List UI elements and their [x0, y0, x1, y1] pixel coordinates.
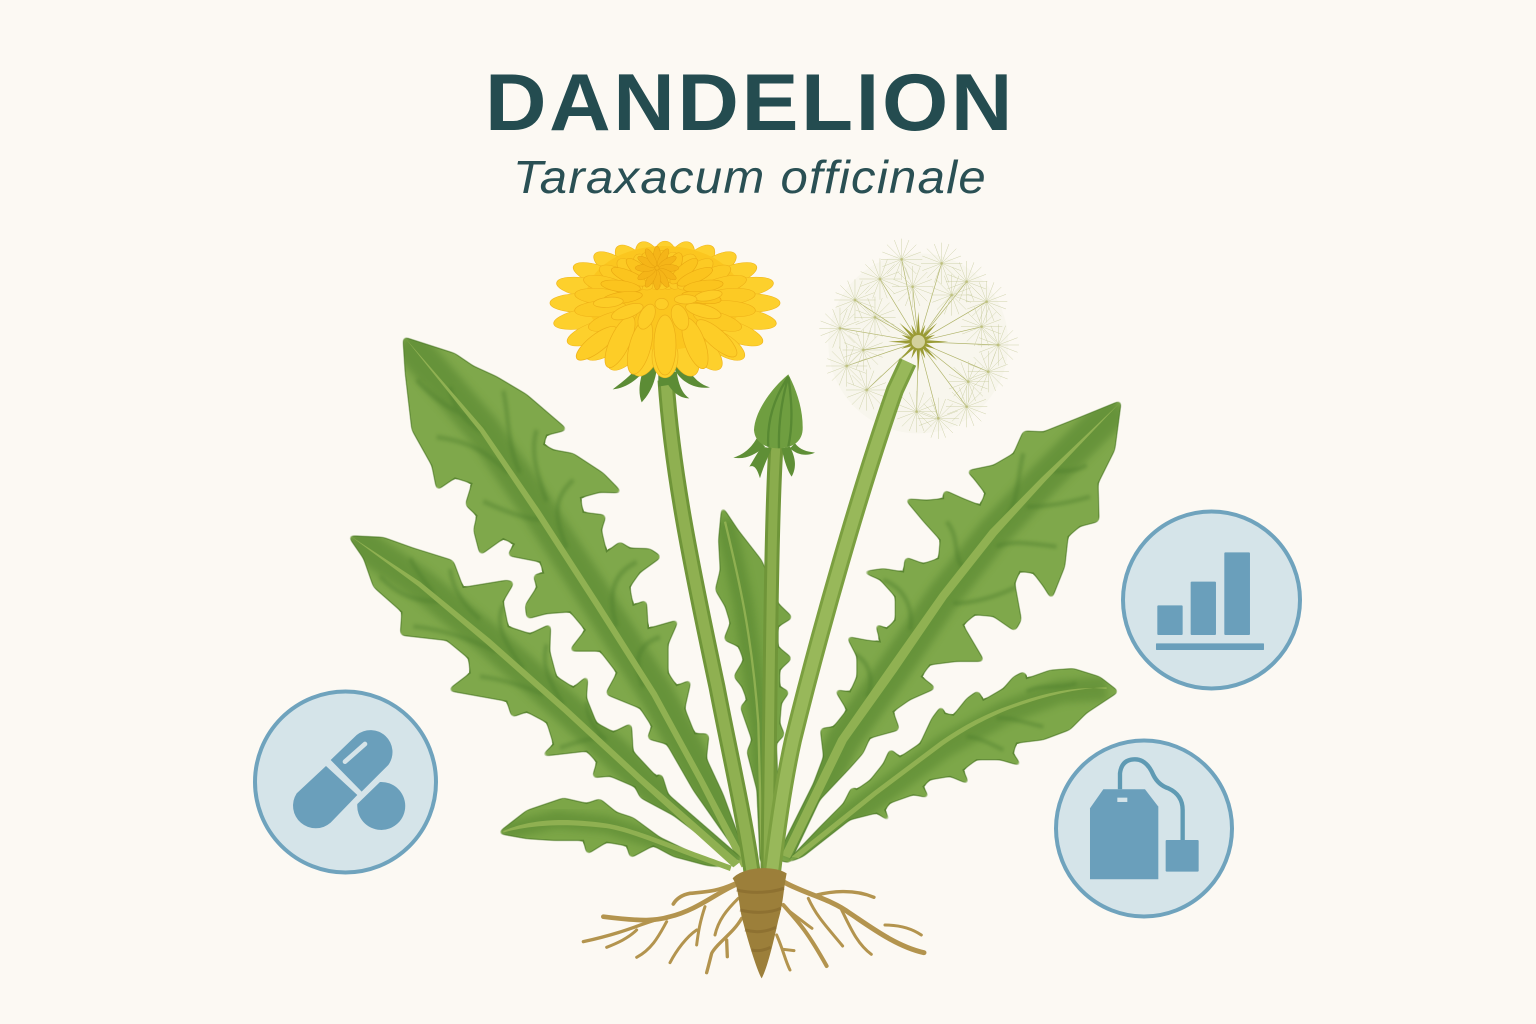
pills — [293, 730, 405, 830]
icon: bar chart — [1123, 512, 1300, 688]
leaf: upper left — [403, 336, 748, 867]
seed head center — [888, 312, 948, 372]
outer ray petals — [550, 239, 780, 378]
icon: capsule and tablet — [255, 692, 436, 872]
infographic canvas — [253, 74, 1302, 978]
side roots — [583, 882, 924, 973]
midrib — [792, 687, 1107, 858]
bars and baseline — [1156, 552, 1264, 650]
midrib — [350, 536, 740, 867]
middle ray petals — [573, 251, 757, 336]
midrib — [782, 403, 1119, 858]
flower disc fill — [586, 246, 742, 350]
stem: seed head — [772, 362, 908, 872]
midrib — [503, 820, 732, 871]
badge circle — [255, 692, 436, 872]
seed tufts — [819, 239, 1019, 439]
stem: flower — [666, 380, 752, 872]
leaf: lower right — [783, 668, 1119, 865]
tea bag and tag — [1090, 759, 1199, 879]
flower sepals — [613, 343, 710, 402]
leaf: lower left — [347, 535, 747, 867]
badge circle — [1123, 512, 1300, 688]
seed head (dandelion clock) — [819, 239, 1019, 439]
yellow flower head — [550, 239, 780, 378]
taproot and side roots — [583, 868, 924, 978]
title: DANDELION — [485, 58, 1015, 148]
leaf: upper right — [777, 400, 1122, 863]
flower bud — [733, 374, 815, 478]
midrib — [405, 338, 748, 867]
leaf: small lower left — [497, 798, 733, 871]
icon: tea bag — [1056, 740, 1232, 916]
inner ray petals — [600, 250, 724, 306]
flower core florets — [635, 246, 679, 290]
dandelion plant — [347, 239, 1122, 978]
badge circle — [1056, 740, 1232, 916]
taproot body — [733, 868, 787, 978]
midrib — [725, 522, 762, 857]
front petals — [572, 288, 742, 377]
subtitle: latin name: Taraxacum officinale — [513, 151, 987, 203]
stem: bud — [768, 445, 776, 872]
leaf: center narrow — [715, 505, 793, 863]
seed rays — [840, 259, 998, 418]
